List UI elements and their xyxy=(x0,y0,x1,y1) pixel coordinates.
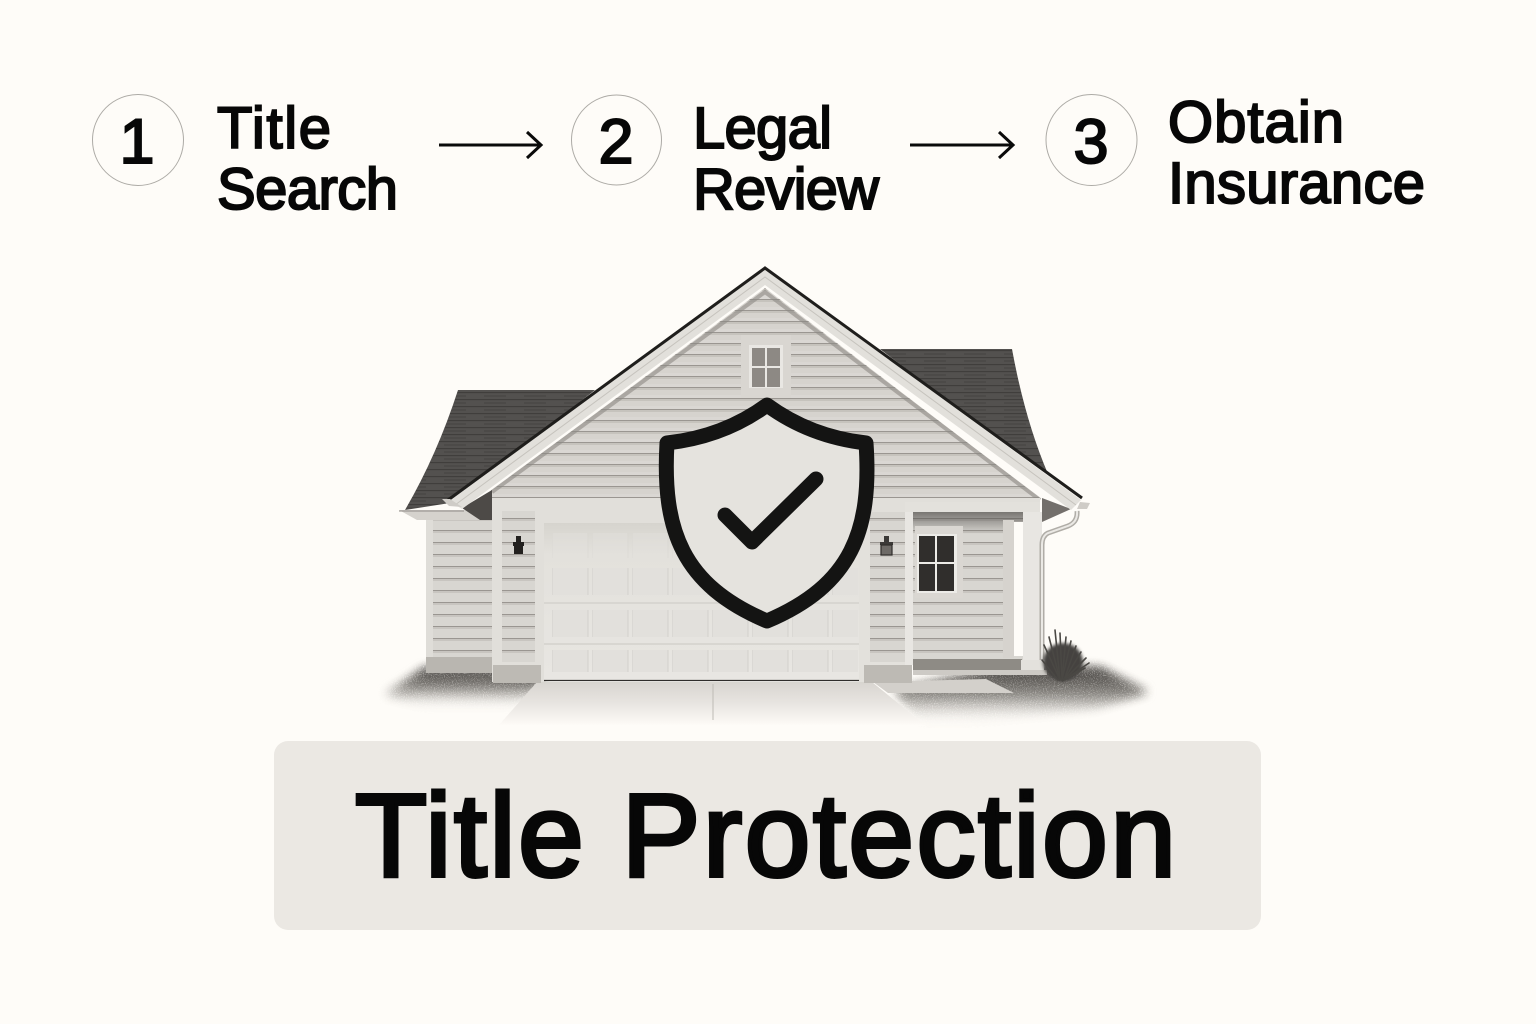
step 1 number circle: 1 xyxy=(119,107,155,177)
icon: left wall lamp xyxy=(513,536,524,554)
step 3 label xyxy=(1168,90,1425,216)
gable shadow under rake xyxy=(492,292,1040,500)
step 2 label xyxy=(693,96,880,222)
banner panel xyxy=(274,741,1261,930)
step 3 number circle: 3 xyxy=(1073,107,1109,177)
porch window xyxy=(915,526,963,598)
step 2 label: Legal xyxy=(693,96,832,161)
soffit right xyxy=(1042,498,1071,522)
step 2 number circle: 2 xyxy=(598,107,634,177)
soffit left xyxy=(462,490,492,520)
roof fascia shading line xyxy=(455,277,1076,505)
ground shadow left xyxy=(385,668,540,712)
title banner xyxy=(274,741,1261,930)
garage door xyxy=(544,523,860,681)
check mark xyxy=(725,479,816,542)
gable wall siding xyxy=(492,288,1040,512)
left wing wall xyxy=(399,510,492,673)
step 1 label: Title xyxy=(217,96,331,161)
shield outline xyxy=(666,405,867,621)
driveway xyxy=(498,682,926,726)
step 2 number circle xyxy=(572,95,662,185)
icon: right wall lamp xyxy=(880,536,893,555)
roof fascia trim xyxy=(449,269,1081,510)
roof black edge xyxy=(448,268,1082,500)
banner heading: Title Protection xyxy=(355,770,1176,902)
house illustration xyxy=(385,268,1148,730)
arrow: step 2 to step 3 xyxy=(910,132,1013,158)
step 1 label: Search xyxy=(217,157,398,222)
gutter downspout xyxy=(1042,511,1077,660)
step 2 label: Review xyxy=(693,157,880,222)
walkway xyxy=(873,679,1014,693)
right siding pier xyxy=(859,512,912,683)
porch xyxy=(905,502,1047,675)
step 1 number circle xyxy=(92,94,184,186)
driveway joint xyxy=(712,684,714,720)
gutter caps xyxy=(442,499,1090,509)
roof right xyxy=(880,349,1048,474)
ground shadow right xyxy=(895,668,1148,730)
gable window xyxy=(741,335,791,398)
arrow: step 1 to step 2 xyxy=(439,132,541,158)
step 3 label: Obtain xyxy=(1168,90,1344,155)
step 3 label: Insurance xyxy=(1168,151,1425,216)
step 2: legal review xyxy=(572,95,880,222)
step 3: obtain insurance xyxy=(1046,90,1425,216)
step 1: title search xyxy=(92,94,398,222)
header band xyxy=(492,498,1040,523)
shrub xyxy=(1042,630,1089,681)
icon: shield with check xyxy=(666,405,867,621)
step 3 number circle xyxy=(1046,94,1137,186)
roof left xyxy=(405,390,595,510)
left siding pier xyxy=(492,498,544,683)
step 1 label xyxy=(217,96,398,222)
